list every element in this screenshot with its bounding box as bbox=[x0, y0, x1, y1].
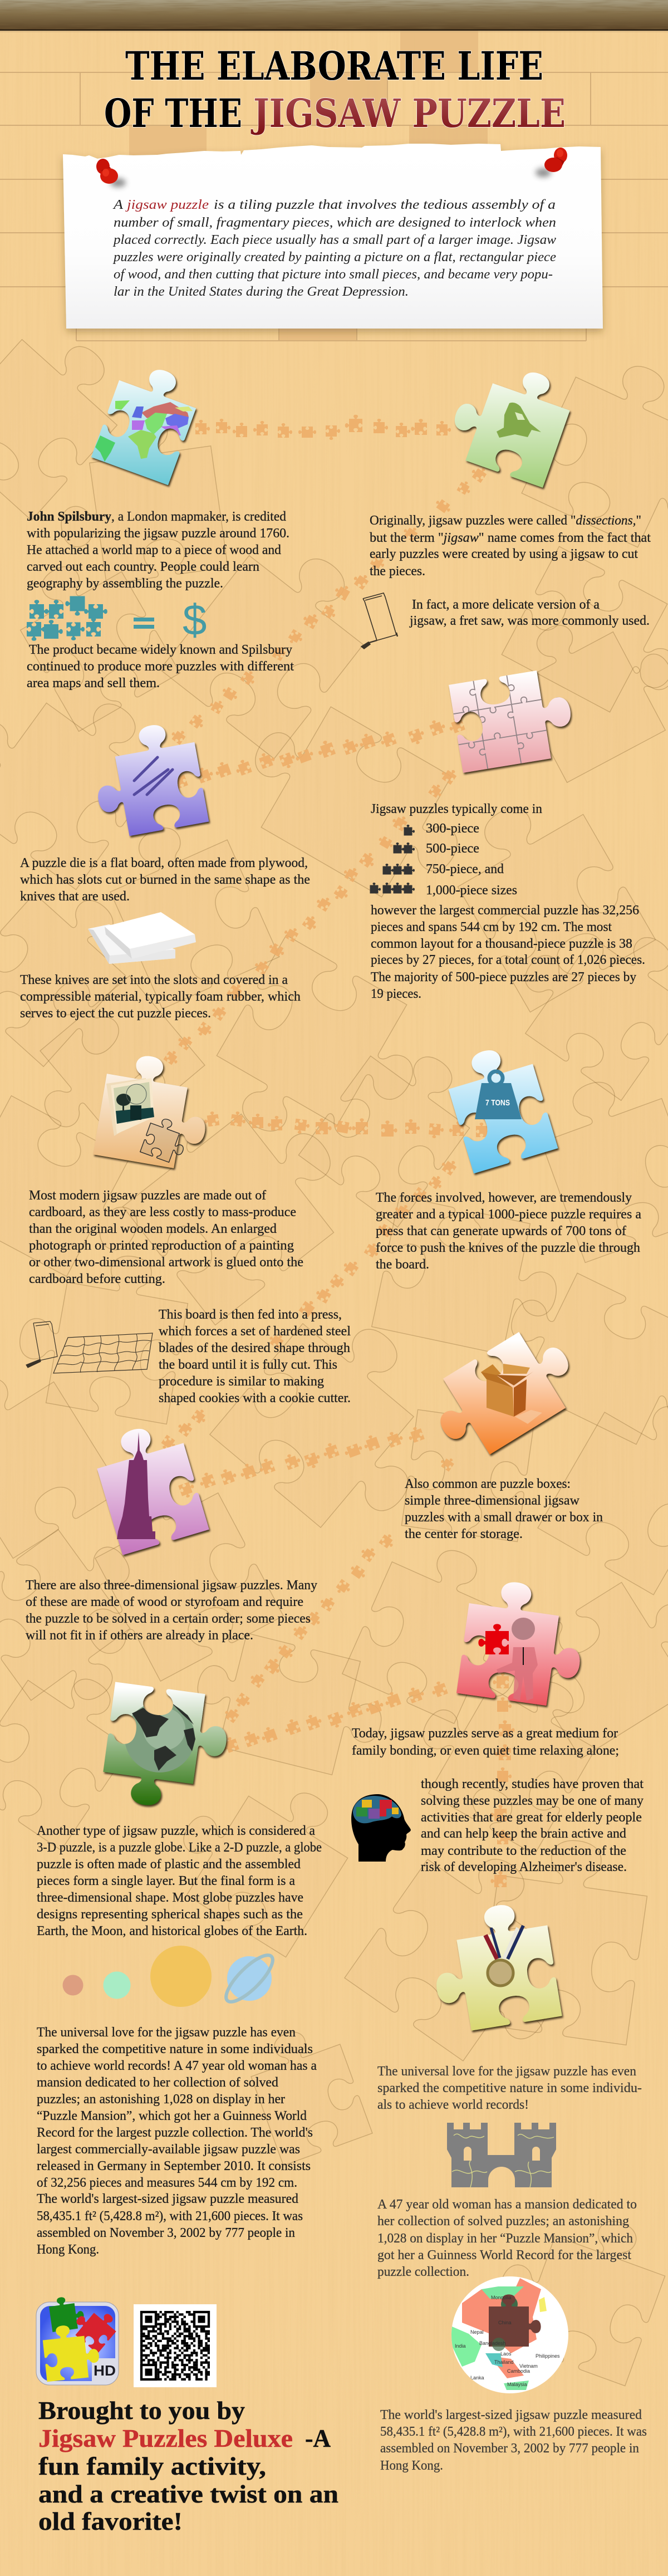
text: John Spilsbury: John Spilsbury, a London mapmaker, is credited bbox=[27, 510, 286, 524]
text: cardboard bbox=[29, 1188, 303, 1286]
text: largest commercial puzzle: The majority of 500-piece puzzles are 27 pieces by bbox=[371, 970, 636, 985]
text: universal love: Record for the largest puzzle collection. The world's bbox=[37, 2126, 313, 2140]
call to action: and a creative twist on an bbox=[38, 2480, 338, 2508]
pin: right bbox=[536, 148, 567, 177]
icon: saw and cut puzzle sheet bbox=[26, 1321, 153, 1373]
text: alzheimer's: activities that are great for elderly people bbox=[421, 1810, 642, 1825]
piece: world map bbox=[91, 370, 198, 488]
text: originally dissections: the pieces. bbox=[370, 564, 425, 579]
piece: medal bbox=[425, 1898, 562, 2035]
text: John Spilsbury: He attached a world map to a piece of wood and bbox=[27, 543, 281, 557]
map: Hong Kong region circle: Vietnam bbox=[519, 2363, 538, 2369]
text: the product bbox=[27, 643, 294, 690]
text: the product: The product became widely known and Spilsbury bbox=[29, 643, 292, 657]
title: THE ELABORATE LIFE bbox=[125, 43, 543, 89]
text: knives bbox=[20, 973, 301, 1021]
map: Hong Kong region circle: Cambodia bbox=[507, 2368, 530, 2374]
text: puzzle boxes: puzzles with a small drawer or box in bbox=[405, 1510, 603, 1525]
photo prints bbox=[106, 1078, 154, 1136]
text: puzzle die: knives that are used. bbox=[20, 889, 130, 904]
text: family bonding bbox=[352, 1726, 619, 1758]
text: largest commercial puzzle bbox=[371, 903, 645, 1001]
icon: app icon bbox=[36, 2294, 122, 2385]
text: forces: The forces involved, however, are tremendously bbox=[376, 1191, 632, 1205]
trail: jigsaw piece down to die piece bbox=[169, 464, 489, 745]
equals sign bbox=[134, 618, 154, 629]
text: globes bbox=[37, 1824, 322, 1938]
call to action: Brought to you by bbox=[38, 2396, 245, 2425]
text: alzheimer's bbox=[421, 1777, 644, 1874]
text: universal love: “Puzzle Mansion”, which got her a Guinness World bbox=[37, 2109, 307, 2123]
trail: family piece to medal piece bbox=[490, 1672, 515, 1887]
text: universal love: sparked the competitive nature in some individuals bbox=[37, 2042, 313, 2056]
text: universal love short bbox=[377, 2064, 642, 2112]
map: Hong Kong region circle: Philippines bbox=[536, 2353, 560, 2359]
text: puzzle die bbox=[20, 856, 310, 904]
text: three-dimensional: There are also three-dimensional jigsaw puzzles. Many bbox=[26, 1578, 317, 1593]
text: universal love short: The universal love for the jigsaw puzzle has even bbox=[377, 2064, 636, 2079]
trail: cardboard piece to weight piece bbox=[203, 1111, 490, 1139]
map: Hong Kong region circle: China bbox=[498, 2320, 512, 2325]
text: puzzle mansion: got her a Guinness World Record for the largest bbox=[377, 2248, 631, 2262]
text: John Spilsbury bbox=[27, 510, 289, 591]
text: cardboard: or other two-dimensional artwork is glued onto the bbox=[29, 1255, 303, 1270]
piece: seven ton weight bbox=[441, 1039, 558, 1173]
panel: torn paper note bbox=[63, 144, 603, 329]
call to action: -A bbox=[305, 2424, 331, 2452]
text: largest-sized puzzle: assembled on November 3, 2002 by 777 people in bbox=[380, 2441, 639, 2456]
text: alzheimer's: though recently, studies have proven that bbox=[421, 1777, 644, 1791]
text: knives: These knives are set into the slots and covered in a bbox=[20, 973, 288, 987]
intro text: of wood, and then cutting that picture into small pieces, and became very popu- bbox=[114, 267, 553, 282]
map: Hong Kong region circle: Mongolia bbox=[491, 2295, 512, 2300]
text: three-dimensional: of these are made of wood or styrofoam and require bbox=[26, 1595, 303, 1609]
trail: map piece to jigsaw piece bbox=[195, 415, 451, 440]
size labels bbox=[426, 821, 517, 898]
text: universal love: mansion dedicated to her collection of solved bbox=[37, 2075, 278, 2090]
weight label: 7 TONS bbox=[485, 1098, 510, 1108]
text: universal love: 58,435.1 ft² (5,428.8 m²), with 21,600 pieces. It was bbox=[37, 2209, 303, 2224]
text: three-dimensional: will not fit in if others are already in place. bbox=[26, 1628, 253, 1643]
text: largest-sized puzzle: The world's largest-sized jigsaw puzzle measured bbox=[380, 2408, 642, 2422]
trail: pink piece to cardboard piece bbox=[163, 766, 459, 1067]
trail: box piece to skyscraper piece bbox=[178, 1426, 425, 1499]
text: puzzle mansion: puzzle collection. bbox=[377, 2265, 469, 2279]
text: universal love: of 32,256 pieces and measures 544 cm by 192 cm. bbox=[37, 2176, 297, 2190]
icons: size pieces bbox=[370, 825, 415, 893]
icon: QR code bbox=[134, 2304, 217, 2387]
call to action bbox=[38, 2396, 338, 2535]
text: cardboard: cardboard, as they are less costly to mass-produce bbox=[29, 1205, 296, 1220]
text: globes: designs representing spherical shapes such as the bbox=[37, 1907, 303, 1922]
text: three-dimensional: the puzzle to be solved in a certain order; some pieces bbox=[26, 1612, 311, 1626]
text: originally dissections bbox=[370, 513, 651, 579]
call to action: fun family activity, bbox=[38, 2452, 266, 2480]
text: puzzle die: A puzzle die is a flat board, often made from plywood, bbox=[20, 856, 308, 870]
text: press: the board until it is fully cut. This bbox=[159, 1358, 337, 1372]
header wood band bbox=[0, 0, 668, 32]
text: globes: pieces form a single layer. But the final form is a bbox=[37, 1874, 295, 1888]
call to action: old favorite! bbox=[38, 2507, 183, 2535]
text: universal love bbox=[37, 2025, 317, 2257]
pieces bbox=[27, 596, 107, 641]
size labels: 1,000-piece sizes bbox=[426, 883, 517, 898]
intro text: jigsaw puzzle bbox=[125, 198, 209, 212]
text: originally dissections: Originally, jigsaw puzzles were called "dissections," bbox=[370, 513, 641, 528]
dollar sign: $ bbox=[183, 595, 207, 644]
text: originally dissections: but the term "jigsaw" name comes from the fact that bbox=[370, 531, 651, 545]
call to action: Jigsaw Puzzles Deluxe bbox=[38, 2424, 293, 2452]
title: OF THE bbox=[104, 90, 242, 136]
intro text: lar in the United States during the Great Depression. bbox=[114, 285, 409, 299]
text: John Spilsbury: carved out each country. People could learn bbox=[27, 560, 259, 574]
icon: globe bbox=[125, 1702, 195, 1772]
text: three-dimensional bbox=[26, 1578, 317, 1643]
text: largest commercial puzzle: 19 pieces. bbox=[371, 987, 421, 1001]
text: universal love short: sparked the competitive nature in some individu- bbox=[377, 2081, 642, 2095]
text: puzzle die: which has slots cut or burned in the same shape as the bbox=[20, 873, 310, 887]
icon: red piece held by figure bbox=[478, 1618, 538, 1701]
text: largest-sized puzzle: 58,435.1 ft² (5,428.8 m²), with 21,600 pieces. It was bbox=[380, 2425, 647, 2439]
size labels: 500-piece bbox=[426, 841, 479, 856]
map: Hong Kong region circle: Thailand bbox=[494, 2359, 514, 2365]
text: puzzle mansion bbox=[377, 2197, 637, 2279]
pin: left bbox=[96, 159, 126, 187]
text: forces: force to push the knives of the puzzle die through bbox=[376, 1241, 640, 1255]
text: the product: continued to produce more puzzles with different bbox=[27, 659, 294, 674]
text: puzzle mansion: her collection of solved puzzles; an astonishing bbox=[377, 2214, 629, 2229]
map: Hong Kong region circle: Lanka bbox=[470, 2375, 484, 2381]
HD label: HD bbox=[94, 2362, 116, 2379]
trail: weight piece to skyscraper piece bbox=[159, 1157, 459, 1453]
piece: jigsaw tool bbox=[443, 352, 578, 488]
text: jigsaw puzzle sizes intro: Jigsaw puzzles typically come in bbox=[371, 802, 542, 816]
text: globes: three-dimensional shape. Most globe puzzles have bbox=[37, 1891, 303, 1905]
text: universal love: assembled on November 3, 2002 by 777 people in bbox=[37, 2226, 295, 2240]
text: universal love: largest commercially-available jigsaw puzzle was bbox=[37, 2142, 300, 2157]
text: universal love: to achieve world records! A 47 year old woman has a bbox=[37, 2059, 317, 2073]
text: forces bbox=[376, 1191, 641, 1272]
text: universal love short: als to achieve world records! bbox=[377, 2098, 529, 2112]
intro text: A bbox=[112, 198, 123, 212]
floor planks behind the header bbox=[0, 31, 668, 341]
text: originally dissections: early puzzles were created by using a jigsaw to cut bbox=[370, 547, 638, 561]
icon: planets bbox=[62, 1946, 279, 2008]
text: largest commercial puzzle: common layout for a thousand-piece puzzle is 38 bbox=[371, 937, 632, 951]
text: alzheimer's: and can help keep the brain active and bbox=[421, 1826, 626, 1841]
trail: pink piece to die piece bbox=[169, 716, 465, 790]
intro text: number of small, fragmentary pieces, which are designed to interlock when bbox=[114, 216, 556, 230]
intro text: is a tiling puzzle that involves the tedious assembly of a bbox=[214, 198, 556, 212]
text: largest commercial puzzle: however the largest commercial puzzle has 32,256 bbox=[371, 903, 639, 918]
text: press: This board is then fed into a press, bbox=[159, 1307, 342, 1322]
intro text: placed correctly. Each piece usually has a small part of a larger image. Jigsaw bbox=[112, 233, 556, 247]
title: JIGSAW PUZZLE bbox=[250, 90, 566, 136]
text: puzzle boxes: Also common are puzzle boxes: bbox=[405, 1477, 571, 1491]
die slots bbox=[134, 757, 173, 795]
text: knives: compressible material, typically foam rubber, which bbox=[20, 990, 301, 1004]
text: fret saw bbox=[409, 598, 650, 628]
text: family bonding: Today, jigsaw puzzles serve as a great medium for bbox=[352, 1726, 618, 1741]
text: largest-sized puzzle bbox=[380, 2408, 647, 2473]
trail: box piece to globe piece bbox=[223, 1454, 456, 1723]
icon: medal bbox=[485, 1926, 523, 1986]
size labels: 750-piece, and bbox=[426, 862, 504, 876]
text: puzzle mansion: A 47 year old woman has a mansion dedicated to bbox=[377, 2197, 637, 2212]
map: Hong Kong region circle: India bbox=[455, 2343, 466, 2349]
map: Hong Kong region circle: Laos bbox=[500, 2351, 512, 2357]
map: Hong Kong region circle: Bangladesh bbox=[479, 2340, 506, 2346]
text: globes: Another type of jigsaw puzzle, which is considered a bbox=[37, 1824, 315, 1838]
text: puzzle boxes bbox=[405, 1477, 603, 1541]
text: alzheimer's: may contribute to the reduction of the bbox=[421, 1844, 626, 1858]
map: Hong Kong region circle: Nepal bbox=[470, 2329, 484, 2335]
icon: fret saw bbox=[361, 593, 397, 649]
text: cardboard: than the original wooden models. An enlarged bbox=[29, 1222, 277, 1236]
intro text bbox=[112, 198, 556, 299]
piece: cardboard photo bbox=[93, 1050, 216, 1172]
outlined loose piece bbox=[140, 1114, 191, 1165]
icon: puzzle castle bbox=[447, 2123, 556, 2187]
trail: family piece to globe piece bbox=[220, 1680, 448, 1754]
text: press bbox=[159, 1307, 351, 1405]
text: universal love: The world's largest-sized jigsaw puzzle measured bbox=[37, 2192, 298, 2206]
icon: weight bbox=[475, 1071, 522, 1119]
title bbox=[104, 43, 566, 136]
piece: family bonding bbox=[456, 1576, 590, 1710]
text: cardboard: photograph or printed reproduction of a painting bbox=[29, 1238, 294, 1253]
text: puzzle boxes: simple three-dimensional jigsaw bbox=[405, 1493, 580, 1508]
text: globes: puzzle is often made of plastic and the assembled bbox=[37, 1857, 301, 1872]
icon: foam rubber sheets bbox=[88, 912, 196, 964]
text: puzzle mansion: 1,028 on display in her “Puzzle Mansion”, which bbox=[377, 2231, 633, 2246]
icon: skyscraper silhouette bbox=[117, 1432, 155, 1539]
text: family bonding: family bonding, or even quiet time relaxing alone; bbox=[352, 1744, 619, 1758]
text: globes: Earth, the Moon, and historical globes of the Earth. bbox=[37, 1924, 307, 1938]
inner puzzle lines bbox=[453, 675, 559, 769]
piece: puzzle die bbox=[87, 718, 209, 840]
text: largest commercial puzzle: pieces by 27 pieces, for a total count of 1,026 pieces. bbox=[371, 953, 645, 967]
text: press: procedure is similar to making bbox=[159, 1374, 324, 1389]
text: globes: 3-D puzzle, is a puzzle globe. Like a 2-D puzzle, a globe bbox=[37, 1840, 322, 1855]
icon: jigsaw silhouette bbox=[497, 403, 541, 438]
text: universal love: puzzles; an astonishing 1,028 on display in her bbox=[37, 2092, 285, 2107]
text: largest-sized puzzle: Hong Kong. bbox=[380, 2459, 443, 2473]
text: universal love: Hong Kong. bbox=[37, 2242, 99, 2257]
puzzle brain bbox=[353, 1796, 401, 1823]
piece: skyscraper bbox=[90, 1417, 209, 1555]
text: universal love: The universal love for the jigsaw puzzle has even bbox=[37, 2025, 296, 2040]
size labels: 300-piece bbox=[426, 821, 479, 836]
map: Hong Kong region circle: Malaysia bbox=[507, 2382, 527, 2387]
text: John Spilsbury: geography by assembling the puzzle. bbox=[27, 576, 223, 591]
text: cardboard: cardboard before cutting. bbox=[29, 1272, 165, 1286]
text: cardboard: Most modern jigsaw puzzles are made out of bbox=[29, 1188, 266, 1203]
text: John Spilsbury: with popularizing the jigsaw puzzle around 1760. bbox=[27, 526, 289, 541]
text: knives: serves to eject the cut puzzle pieces. bbox=[20, 1006, 211, 1021]
icon: cardboard box bbox=[481, 1364, 542, 1424]
text: press: shaped cookies with a cookie cutter. bbox=[159, 1391, 351, 1405]
text: press: which forces a set of hardened steel bbox=[159, 1324, 351, 1339]
map: Hong Kong region circle bbox=[448, 2276, 568, 2393]
world map continents bbox=[95, 400, 193, 462]
text: fret saw: jigsaw, a fret saw, was more commonly used. bbox=[409, 614, 650, 628]
piece: puzzle globe bbox=[100, 1682, 232, 1815]
text: forces: the board. bbox=[376, 1257, 429, 1272]
text: puzzle boxes: the center for storage. bbox=[405, 1527, 523, 1541]
piece: puzzle box bbox=[420, 1318, 588, 1468]
text: fret saw: In fact, a more delicate version of a bbox=[412, 598, 600, 612]
list: puzzle sizes bbox=[370, 821, 517, 898]
text: the product: area maps and sell them. bbox=[27, 676, 160, 690]
text: largest commercial puzzle: pieces and spans 544 cm by 192 cm. The most bbox=[371, 920, 612, 934]
icon: head with puzzle brain bbox=[351, 1794, 411, 1862]
text: forces: greater and a typical 1000-piece puzzle requires a bbox=[376, 1207, 641, 1222]
intro text: puzzles were originally created by painting a picture on a flat, rectangular piece bbox=[112, 250, 556, 265]
text: universal love: released in Germany in September 2010. It consists bbox=[37, 2159, 311, 2173]
text: forces: press that can generate upwards of 700 tons of bbox=[376, 1224, 626, 1238]
text: alzheimer's: solving these puzzles may be one of many bbox=[421, 1794, 644, 1808]
piece: cut puzzle in pink bbox=[449, 670, 573, 776]
text: press: blades of the desired shape through bbox=[159, 1341, 350, 1355]
text: alzheimer's: risk of developing Alzheimer's disease. bbox=[421, 1860, 627, 1874]
icon: puzzle pieces equal money bbox=[27, 595, 207, 644]
